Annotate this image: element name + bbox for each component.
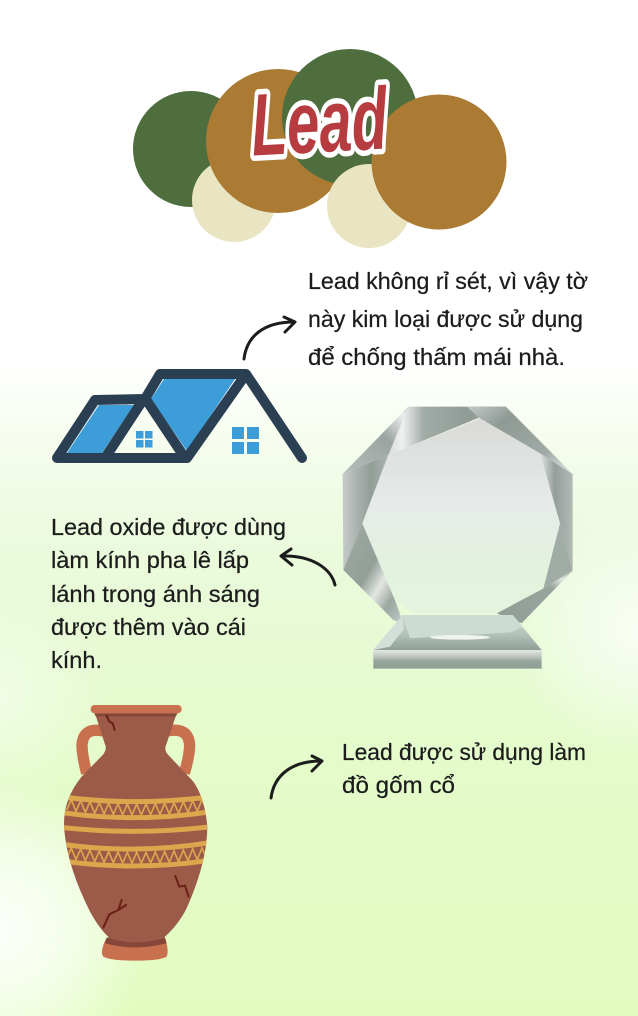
title text: Lead: [249, 68, 391, 174]
cracks: [103, 716, 189, 928]
text block: roofing: Lead không rỉ sét, vì vậy tờ: [308, 268, 588, 294]
text block: ancient pottery: [342, 739, 586, 798]
icon: crystal trophy: [343, 407, 573, 669]
arrow: roof to text: [244, 317, 295, 359]
vase body: [64, 713, 207, 942]
icon: large window: [232, 427, 259, 454]
text block: ancient pottery: đồ gốm cổ: [342, 772, 455, 798]
text block: lead oxide glass: kính.: [51, 647, 102, 673]
text block: ancient pottery: Lead được sử dụng làm: [342, 739, 586, 765]
arrow: vase to text: [271, 756, 322, 798]
text block: lead oxide glass: lánh trong ánh sáng: [51, 581, 260, 607]
title: painted circles with Lead: [133, 49, 506, 248]
right handle: [167, 730, 190, 773]
text block: roofing: này kim loại được sử dụng: [308, 306, 583, 332]
icon: house roof: [57, 374, 302, 458]
icon: ancient vase: [60, 705, 212, 961]
text block: roofing: để chống thấm mái nhà.: [308, 344, 565, 370]
icon: small window: [136, 431, 152, 448]
left handle: [82, 730, 103, 773]
vase rim: [91, 705, 182, 713]
arrow: trophy to text: [281, 549, 335, 585]
vase foot: [102, 938, 168, 961]
text block: lead oxide glass: được thêm vào cái: [51, 614, 246, 640]
text block: lead oxide glass: làm kính pha lê lấp: [51, 547, 249, 573]
decorative bands: [60, 797, 212, 866]
text block: roofing: [308, 268, 588, 370]
text block: lead oxide glass: [51, 514, 286, 673]
text block: lead oxide glass: Lead oxide được dùng: [51, 514, 286, 540]
